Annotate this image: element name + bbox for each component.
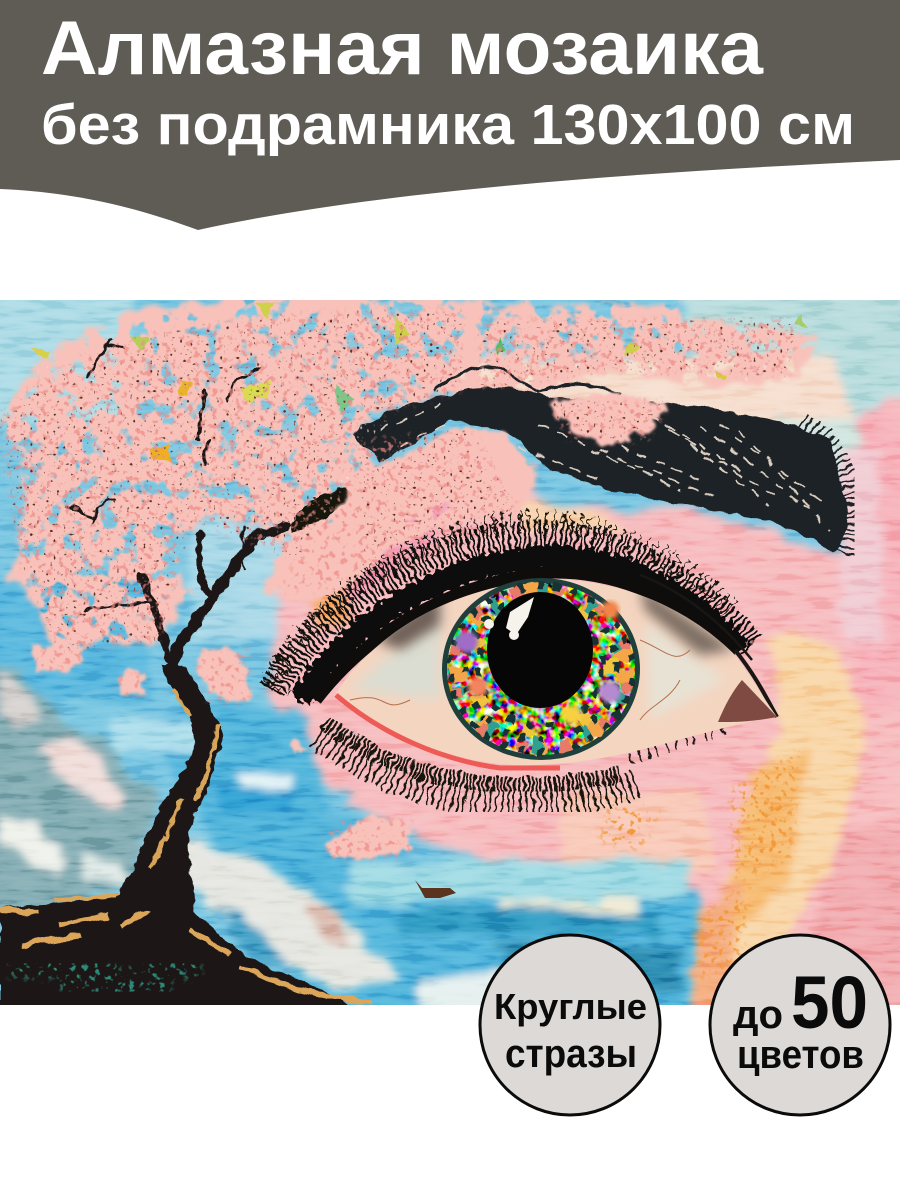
header banner: [0, 0, 900, 230]
badge: up to 50 colours: [710, 935, 890, 1115]
badge: up to 50 colours: до: [733, 993, 783, 1037]
eye: [270, 520, 780, 805]
badge: up to 50 colours: 50: [791, 961, 868, 1044]
blossom clouds: [0, 296, 815, 858]
blossom branch over the eyebrow: [270, 392, 668, 600]
leaves: [30, 302, 806, 462]
iris: [442, 578, 640, 760]
small boat: [415, 880, 456, 898]
caruncle corner: [718, 680, 777, 722]
sea: [110, 710, 700, 1040]
blossom petal texture: [0, 310, 800, 858]
pupil: [487, 592, 593, 708]
lower lashes: [318, 722, 730, 805]
mountains: [0, 665, 400, 990]
red lower rim: [336, 695, 560, 768]
badge: up to 50 colours: цветов: [737, 1033, 864, 1077]
background sky and face: [0, 280, 900, 1040]
brush stroke texture: [0, 300, 900, 1005]
painting: eye and cherry tree: [0, 280, 900, 1040]
badge: round rhinestones: [480, 935, 660, 1115]
badge: round rhinestones: Круглые: [494, 986, 647, 1027]
orange accents on the cheek: [600, 750, 800, 980]
eyeball: [330, 570, 780, 770]
eyebrow: [270, 367, 849, 600]
title: Алмазная мозаика: [41, 6, 764, 91]
badge: round rhinestones: стразы: [505, 1032, 637, 1076]
upper lashes: [270, 520, 777, 717]
highlight: [484, 597, 534, 640]
cherry tree trunk and branches: [65, 340, 358, 915]
subtitle: без подрамника 130х100 см: [41, 93, 855, 157]
ground and roots: [0, 893, 373, 1005]
